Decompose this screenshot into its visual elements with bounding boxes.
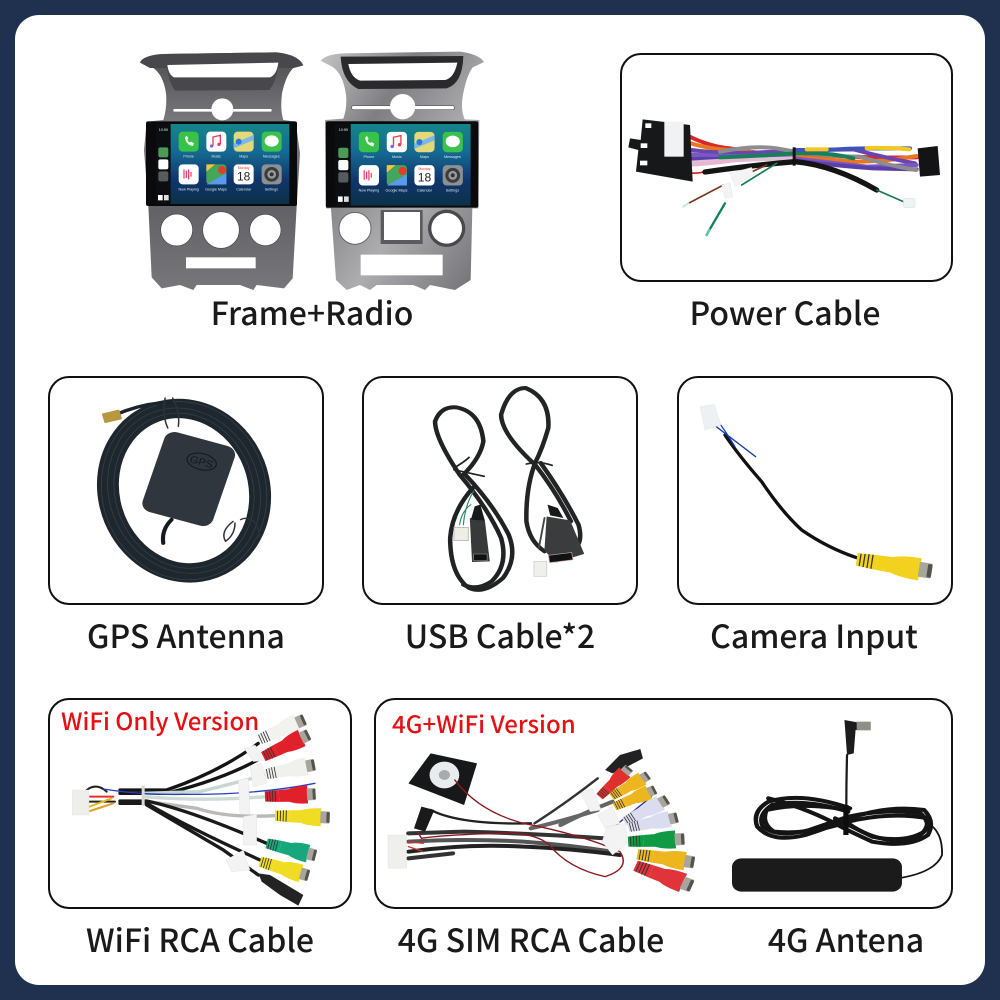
white connector [700, 404, 721, 430]
wire tags [722, 167, 753, 198]
radio screen 2: Music [392, 155, 402, 159]
radio screen 2: Google Maps [386, 189, 408, 193]
label: frame and radio: Frame+Radio [211, 289, 413, 335]
label: 4G SIM RCA cable: 4G SIM RCA Cable [398, 916, 664, 962]
cable tie [142, 786, 145, 806]
white connector [72, 790, 89, 815]
radio screen: Calendar [236, 187, 252, 191]
wire tags [581, 788, 627, 855]
panel: power cable [621, 54, 952, 281]
radio screen: 18 [237, 169, 251, 183]
frame: silver [321, 52, 484, 290]
radio screen 2: Phone [364, 155, 374, 159]
radio screen: Google Maps [205, 187, 227, 191]
label: 4G antenna: 4G Antena [768, 916, 924, 962]
label: USB cable: USB Cable*2 [405, 612, 595, 658]
label: power cable: Power Cable [690, 289, 880, 335]
branch wires [748, 165, 767, 173]
radio screen 2 [326, 121, 478, 208]
white connector [388, 835, 407, 868]
yellow RCA plug [855, 548, 933, 582]
radio screen 2: Messages [444, 155, 461, 159]
blue wire [616, 797, 651, 825]
radio screen [146, 121, 297, 206]
label: WiFi only version: WiFi Only Version [61, 702, 259, 737]
cooling fan [408, 753, 477, 805]
inline plug [414, 807, 434, 832]
RCA plugs [255, 711, 308, 748]
tail connector [903, 198, 915, 208]
GPS puck [140, 430, 238, 528]
right connector [918, 146, 940, 177]
radio screen: 10:59 [159, 128, 168, 132]
RCA plugs [605, 749, 643, 773]
wire bundle [685, 136, 917, 173]
label: GPS antenna: GPS Antenna [87, 612, 285, 658]
radio screen 2: Calendar [417, 189, 433, 193]
right USB plug [539, 513, 585, 564]
label: 4G WiFi version: 4G+WiFi Version [392, 705, 576, 740]
audio jack [258, 873, 303, 906]
camera cable [725, 435, 857, 558]
radio screen 2: 10:59 [339, 128, 348, 132]
black sheath [705, 162, 877, 190]
GPS puck: GPS [188, 454, 215, 471]
cable ties [164, 398, 259, 538]
left connector [628, 119, 693, 182]
radio screen: Messages [263, 154, 280, 158]
label: camera input: Camera Input [710, 612, 918, 658]
RCA wires [103, 743, 315, 875]
radio screen: Music [212, 154, 221, 158]
panel: WiFi RCA cable [49, 699, 351, 908]
panel: camera input [678, 377, 952, 604]
radio screen 2: Maps [420, 155, 429, 159]
left USB cable [435, 407, 512, 590]
wire bundle [408, 778, 620, 858]
4G antenna [732, 720, 942, 892]
wire tags [226, 745, 267, 872]
SMA connector [102, 409, 122, 423]
panel: GPS antenna [49, 377, 323, 604]
radio screen: Phone [183, 154, 194, 158]
panel: USB cable [363, 377, 637, 604]
puck tail [163, 520, 172, 543]
radio screen: Monday [238, 166, 250, 170]
radio screen 2: Settings [446, 189, 459, 193]
frame: dark grey [140, 52, 303, 290]
label: WiFi RCA cable: WiFi RCA Cable [86, 916, 314, 962]
panel: 4G cables [375, 699, 952, 908]
radio screen 2: Monday [418, 167, 431, 171]
left USB plug [470, 518, 490, 562]
small colored wires [87, 787, 115, 811]
right USB cable [501, 388, 580, 551]
radio screen: Maps [239, 154, 248, 158]
radio screen: Now Playing [179, 187, 199, 191]
radio screen: Settings [265, 187, 278, 191]
radio screen 2: 18 [418, 170, 431, 184]
radio screen 2: Now Playing [359, 189, 379, 193]
coil [88, 392, 280, 589]
red fan wire [418, 780, 623, 877]
panel: frame and radio [140, 52, 484, 290]
